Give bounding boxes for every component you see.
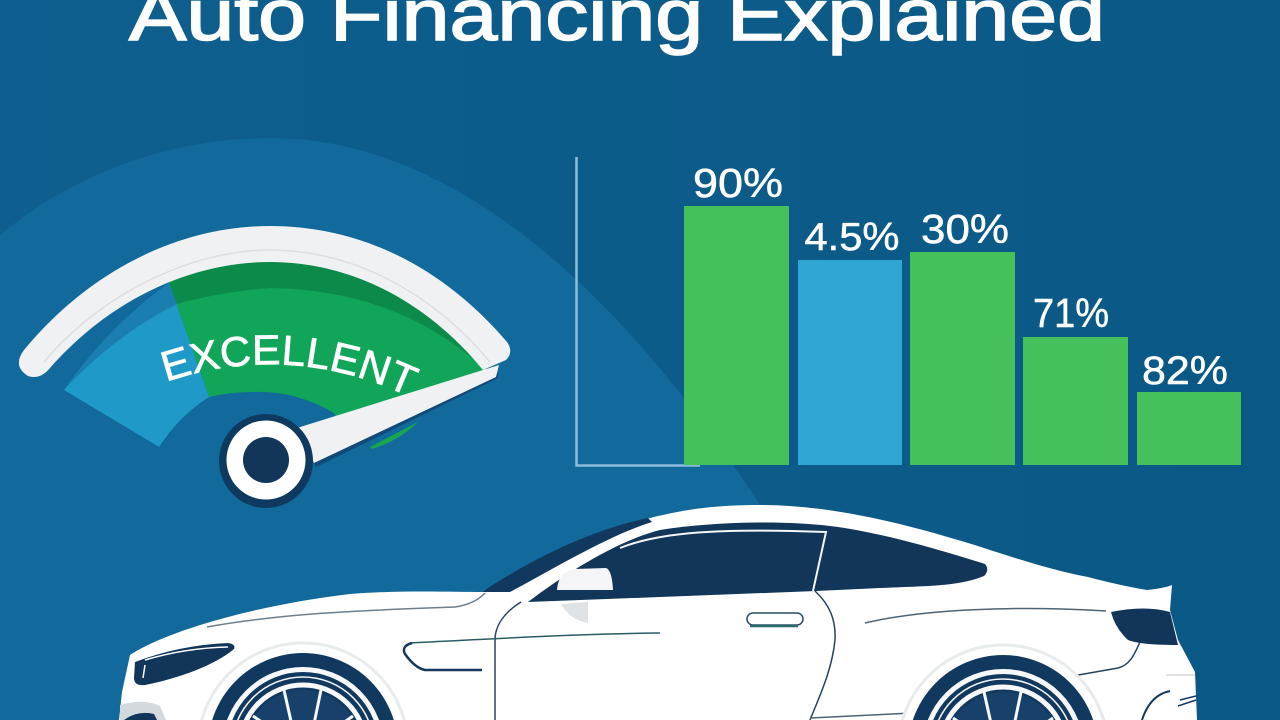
needle hub	[219, 414, 313, 508]
gauge blue sector	[64, 283, 209, 447]
side vent	[404, 643, 482, 670]
needle	[297, 365, 499, 463]
tail light	[1111, 608, 1178, 645]
car body	[119, 505, 1197, 720]
gauge blue sector upper band	[64, 283, 177, 390]
bar 4.5%: 4.5%	[804, 216, 900, 259]
gauge dark green band	[160, 258, 486, 370]
door window frame	[620, 531, 826, 591]
gauge green sector	[160, 258, 486, 425]
sill line	[810, 713, 912, 718]
gauge	[18, 226, 510, 508]
headlight	[134, 643, 234, 685]
side windows	[528, 523, 987, 602]
rear arch line	[1067, 642, 1140, 677]
front wheel	[198, 643, 408, 720]
gauge arc groove	[44, 250, 490, 362]
car	[119, 505, 1197, 720]
door character line	[410, 633, 660, 643]
mirror shadow	[561, 602, 588, 623]
bar 71%	[1023, 290, 1128, 465]
rear wheel	[898, 645, 1108, 720]
door handle	[747, 613, 803, 626]
gauge label: EXCELLENT	[160, 335, 420, 393]
bar 90%: 90%	[693, 160, 783, 206]
hood line	[207, 593, 485, 627]
bar 30%: 30%	[921, 206, 1009, 252]
lighter curved background shape	[0, 138, 760, 720]
side mirror	[557, 568, 613, 590]
needle shadow	[300, 372, 498, 467]
chart axes	[576, 157, 700, 466]
rear bumper lines	[1142, 675, 1196, 720]
bar 82%	[1137, 349, 1241, 465]
shoulder line	[865, 608, 1106, 623]
bar 30%	[910, 206, 1015, 465]
front grille	[120, 702, 166, 720]
bar 4.5%	[798, 216, 902, 465]
bar 82%: 82%	[1142, 349, 1228, 393]
rear door line	[810, 591, 835, 720]
bar 71%: 71%	[1033, 290, 1109, 336]
bar chart	[576, 157, 1241, 466]
green fragment below needle	[370, 422, 418, 449]
gauge white arc	[19, 226, 510, 377]
windscreen sliver	[482, 518, 652, 592]
door outline	[495, 602, 521, 720]
bar 90%	[684, 160, 789, 465]
